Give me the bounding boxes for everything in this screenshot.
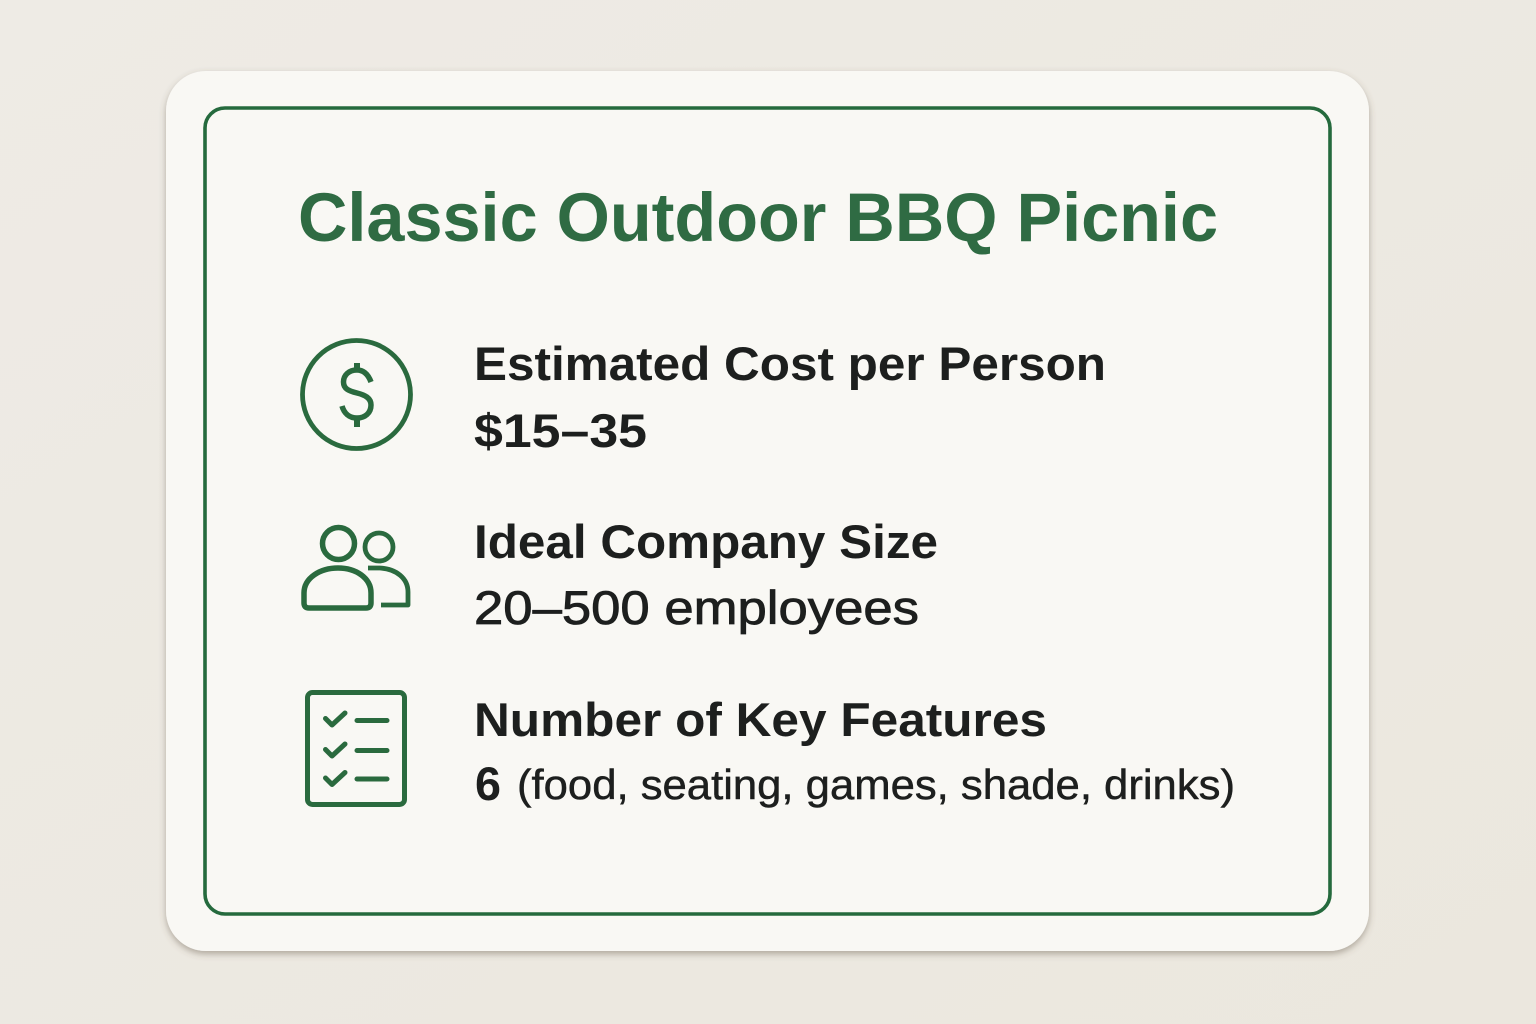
value: cost: $15–35 bbox=[474, 404, 647, 457]
value: employees: 20–500 employees bbox=[474, 581, 919, 634]
heading: key features: Number of Key Features bbox=[474, 693, 1047, 746]
value: feature count: 6 bbox=[475, 757, 501, 810]
icon: dollar coin bbox=[302, 340, 410, 448]
heading: estimated cost: Estimated Cost per Person bbox=[474, 337, 1106, 390]
heading: company size: Ideal Company Size bbox=[474, 515, 938, 568]
panel: card bbox=[166, 71, 1369, 951]
green inner border bbox=[205, 108, 1330, 914]
icon: people bbox=[304, 528, 408, 608]
title: Classic Outdoor BBQ Picnic bbox=[298, 179, 1218, 256]
value: feature list: (food, seating, games, shade, drinks) bbox=[517, 761, 1235, 808]
icon: checklist bbox=[308, 692, 404, 804]
